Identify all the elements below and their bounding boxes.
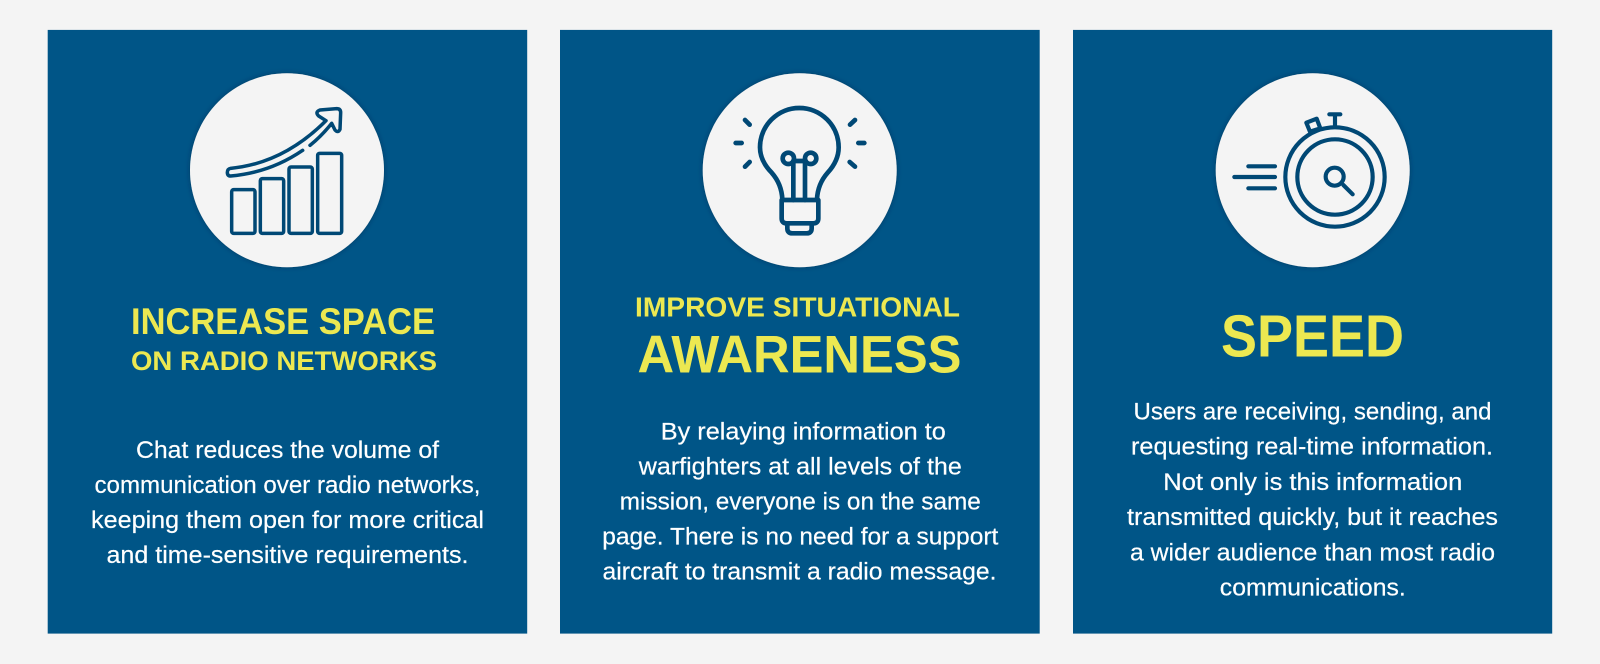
heading: improve situational: IMPROVE SITUATIONAL bbox=[635, 292, 960, 323]
text block: speed body copy bbox=[1127, 398, 1498, 602]
text block: chat body copy: communication over radio networks, bbox=[94, 472, 480, 499]
text block: chat body copy: Chat reduces the volume of bbox=[136, 437, 439, 464]
text block: speed body copy: communications. bbox=[1220, 575, 1406, 602]
icon: rising bar chart with arrow bbox=[190, 73, 384, 267]
text block: chat body copy: and time-sensitive requirements. bbox=[106, 542, 468, 569]
text block: speed body copy: Users are receiving, sending, and bbox=[1134, 398, 1492, 425]
heading: on radio networks: ON RADIO NETWORKS bbox=[131, 346, 437, 376]
text block: awareness body copy: page. There is no need for a support bbox=[602, 523, 999, 550]
text block: chat body copy bbox=[91, 437, 484, 569]
heading: increase space: INCREASE SPACE bbox=[131, 301, 435, 342]
text block: speed body copy: a wider audience than most radio bbox=[1130, 539, 1495, 566]
panel: speed bbox=[1073, 30, 1552, 634]
text block: chat body copy: keeping them open for more critical bbox=[91, 507, 484, 534]
text block: awareness body copy bbox=[602, 418, 999, 585]
text block: awareness body copy: mission, everyone is on the same bbox=[620, 488, 981, 515]
icon: stopwatch with speed lines bbox=[1216, 73, 1410, 267]
heading: speed: SPEED bbox=[1221, 304, 1404, 370]
text block: speed body copy: requesting real-time information. bbox=[1131, 434, 1493, 461]
text block: awareness body copy: aircraft to transmit a radio message. bbox=[602, 558, 996, 585]
panel: improve situational awareness bbox=[560, 30, 1040, 634]
text block: speed body copy: Not only is this information bbox=[1163, 469, 1462, 496]
text block: awareness body copy: warfighters at all levels of the bbox=[638, 453, 962, 480]
icon: light bulb bbox=[703, 73, 897, 267]
panel: increase space on radio networks bbox=[48, 30, 527, 634]
text block: speed body copy: transmitted quickly, but it reaches bbox=[1127, 504, 1498, 531]
text block: awareness body copy: By relaying information to bbox=[661, 418, 946, 445]
heading: awareness: AWARENESS bbox=[638, 326, 962, 385]
